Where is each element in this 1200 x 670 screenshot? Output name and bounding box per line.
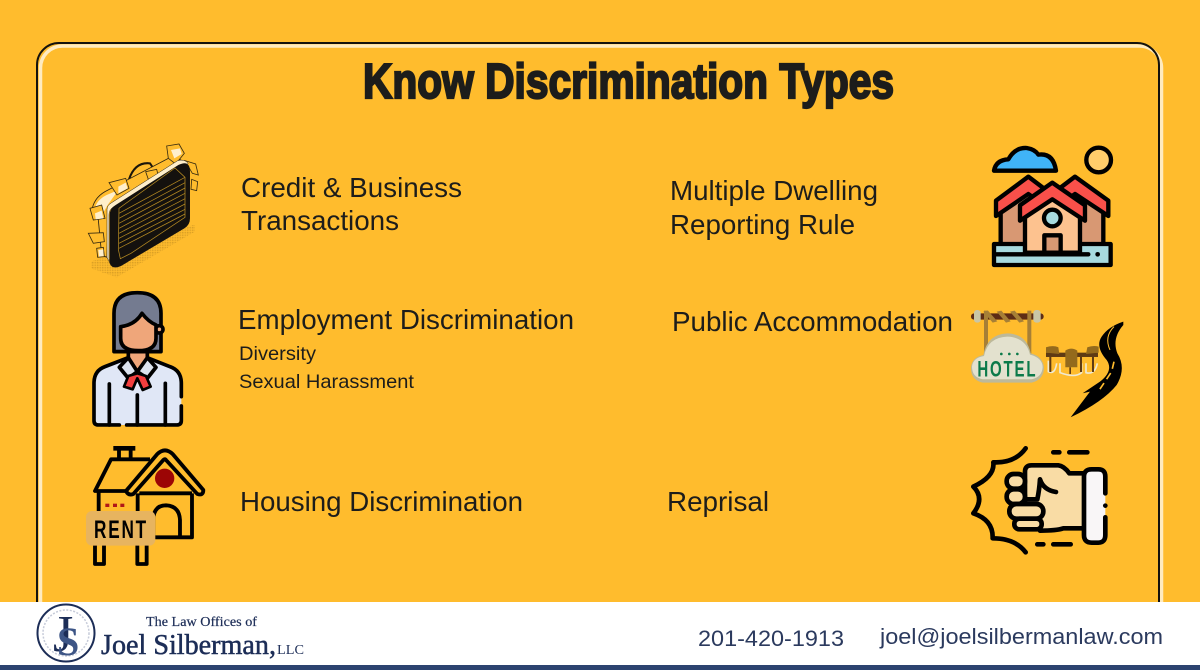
text: law office name — [101, 615, 304, 661]
icon: house for rent: RENT — [94, 516, 148, 544]
text: credit and business transactions — [241, 172, 462, 236]
text: credit and business transactions: Credit & Business — [241, 172, 462, 203]
icon: employee woman — [94, 293, 181, 425]
text: reprisal: Reprisal — [667, 486, 769, 517]
icon: briefcase with money — [88, 144, 198, 277]
text: public accommodation: Public Accommodation — [672, 306, 953, 337]
logo: JS seal: J — [53, 606, 73, 663]
text: multiple dwelling reporting rule: Reporting Rule — [670, 209, 855, 240]
footer band — [0, 602, 1200, 670]
text: law office name: LLC — [277, 643, 304, 658]
text: credit and business transactions: Transactions — [241, 205, 399, 236]
text: employment discrimination: Sexual Harassment — [239, 371, 415, 393]
text: law office name: Joel Silberman, — [101, 630, 276, 661]
icon: house for rent — [86, 448, 203, 564]
logo: JS seal — [38, 604, 94, 664]
text: email address: joel@joelsilbermanlaw.com — [879, 624, 1163, 649]
icon: hotel sign, table and road: HOTEL — [977, 356, 1037, 381]
icon: houses with cloud and sun — [994, 148, 1111, 265]
text: law office name: The Law Offices of — [146, 615, 257, 630]
text: housing discrimination: Housing Discrimination — [240, 486, 523, 517]
logo: JS seal: S — [57, 619, 79, 664]
text: phone number: 201-420-1913 — [698, 626, 844, 651]
text: employment discrimination — [238, 304, 574, 393]
icon: hotel sign, table and road — [971, 310, 1123, 417]
text: employment discrimination: Diversity — [239, 343, 316, 365]
icon: fist punching — [973, 448, 1108, 552]
title: Know Discrimination Types — [363, 55, 894, 109]
text: multiple dwelling reporting rule — [670, 175, 878, 240]
text: employment discrimination: Employment Discrimination — [238, 304, 574, 335]
text: multiple dwelling reporting rule: Multiple Dwelling — [670, 175, 878, 206]
